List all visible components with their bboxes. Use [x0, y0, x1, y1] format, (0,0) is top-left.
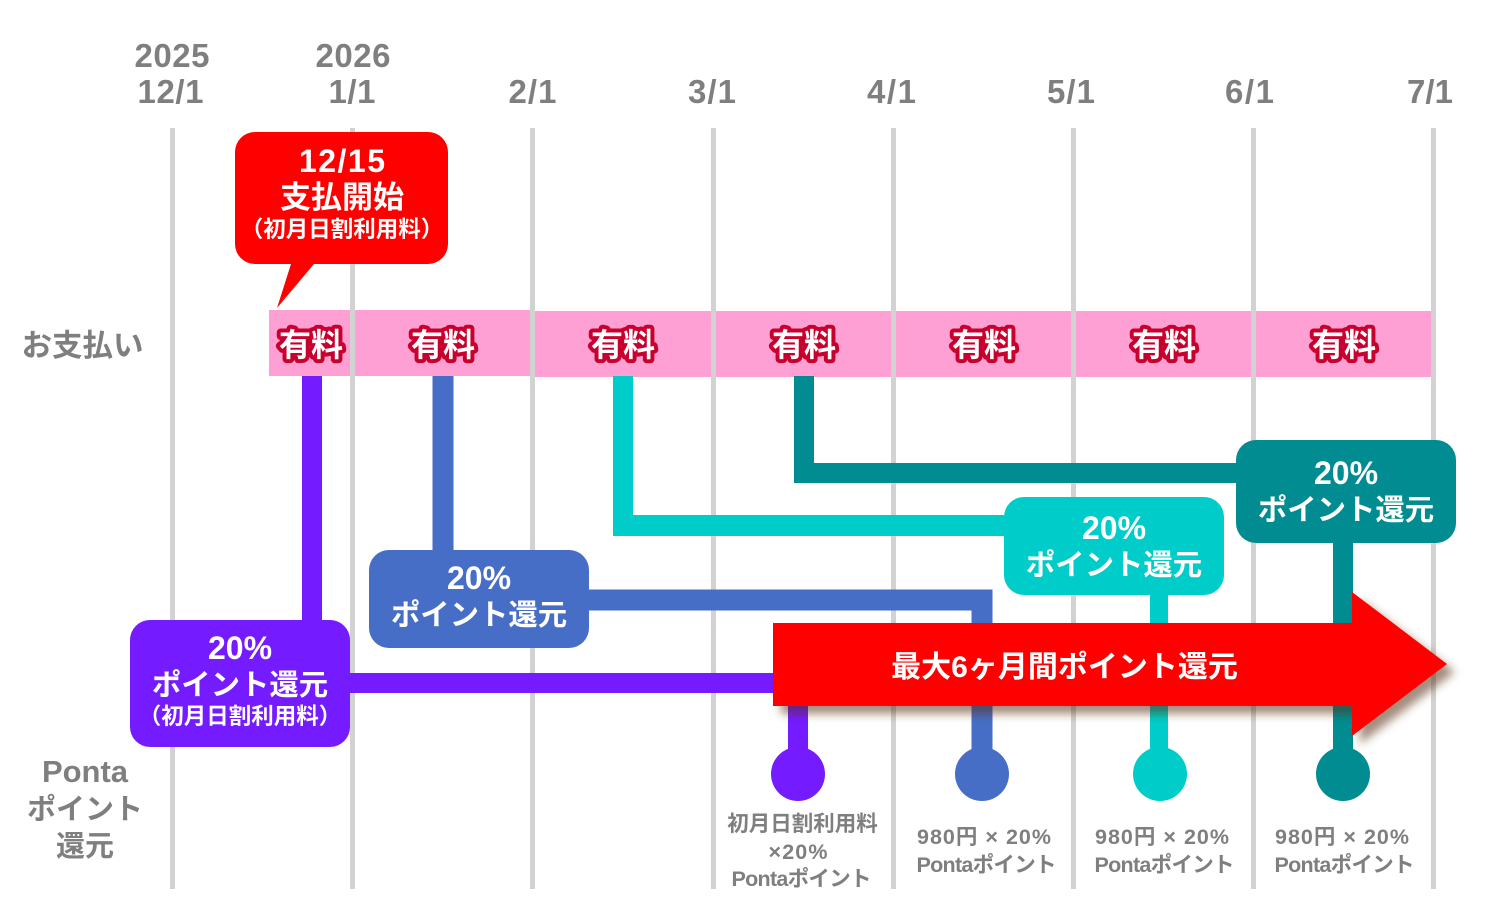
callout: purple 20% return: （初月日割利用料）	[139, 704, 341, 729]
month axis labels: 6/1	[1225, 73, 1274, 110]
callout: dark teal 20% return	[1236, 440, 1456, 543]
connector: third month teal	[613, 376, 1168, 774]
note: fourth month calculation	[1274, 825, 1414, 877]
callout: payment start: 12/15	[299, 143, 385, 179]
note: fourth month calculation: Pontaポイント	[1274, 853, 1414, 877]
callout: payment start: 支払開始	[280, 180, 404, 215]
note: first month calculation: ×20%	[768, 840, 828, 864]
month axis labels: 2025	[134, 37, 210, 74]
paid labels: 有料	[772, 327, 836, 363]
marker: purple end dot	[771, 747, 825, 801]
arrow: up to six months of point return: 最大6ヶ月間ポイント還元	[891, 651, 1238, 684]
connector: second month blue	[443, 376, 982, 774]
note: third month calculation: Pontaポイント	[1094, 853, 1234, 877]
callout: blue 20% return: 20%	[447, 560, 511, 596]
month axis labels: 1/1	[328, 73, 376, 110]
note: second month calculation	[916, 825, 1056, 877]
paid labels: 有料	[279, 327, 343, 363]
callout: payment start	[235, 132, 448, 308]
note: first month calculation: 初月日割利用料	[727, 812, 878, 836]
connector: fourth month dark teal	[804, 376, 1343, 774]
callout: teal 20% return: ポイント還元	[1026, 549, 1202, 582]
paid labels: 有料	[411, 327, 475, 363]
callout: blue 20% return: ポイント還元	[391, 599, 567, 632]
month grid lines	[170, 128, 1436, 889]
note: fourth month calculation: 980円 × 20%	[1275, 825, 1409, 849]
month axis labels	[134, 37, 1453, 110]
paid labels: 有料	[1312, 327, 1376, 363]
paid labels	[279, 327, 1376, 363]
paid labels: 有料	[591, 327, 655, 363]
marker: dark teal end dot	[1316, 747, 1370, 801]
arrow: up to six months of point return	[773, 592, 1447, 736]
note: first month calculation	[727, 812, 878, 891]
note: third month calculation	[1094, 825, 1234, 877]
note: second month calculation: 980円 × 20%	[917, 825, 1051, 849]
callout: dark teal 20% return: 20%	[1314, 455, 1378, 491]
row label: Ponta point return: Ponta	[42, 754, 129, 789]
row label: Ponta point return: ポイント	[27, 793, 143, 826]
note: second month calculation: Pontaポイント	[916, 853, 1056, 877]
month axis labels: 7/1	[1407, 73, 1453, 110]
callout: purple 20% return	[130, 620, 350, 747]
marker: blue end dot	[955, 747, 1009, 801]
note: third month calculation: 980円 × 20%	[1095, 825, 1229, 849]
paid labels: 有料	[952, 327, 1016, 363]
month axis labels: 4/1	[867, 73, 916, 110]
month axis labels: 2/1	[508, 73, 556, 110]
callout: teal 20% return: 20%	[1082, 510, 1146, 546]
callout: dark teal 20% return: ポイント還元	[1258, 494, 1434, 527]
callout: purple 20% return: ポイント還元	[152, 669, 328, 702]
connector: first month purple	[312, 376, 798, 774]
month axis labels: 2026	[316, 37, 390, 74]
callout: teal 20% return	[1004, 497, 1224, 595]
marker: teal end dot	[1133, 747, 1187, 801]
paid labels: 有料	[1132, 327, 1196, 363]
payment row background bar	[269, 310, 1432, 377]
row label: payment: お支払い	[22, 329, 144, 363]
note: first month calculation: Pontaポイント	[732, 867, 872, 891]
row label: Ponta point return: 還元	[56, 831, 114, 863]
month axis labels: 12/1	[138, 73, 204, 110]
row label: Ponta point return	[27, 754, 143, 863]
callout: blue 20% return	[369, 550, 589, 648]
callout: payment start: （初月日割利用料）	[241, 217, 443, 242]
month axis labels: 3/1	[688, 73, 736, 110]
month axis labels: 5/1	[1047, 73, 1095, 110]
callout: purple 20% return: 20%	[208, 630, 272, 666]
